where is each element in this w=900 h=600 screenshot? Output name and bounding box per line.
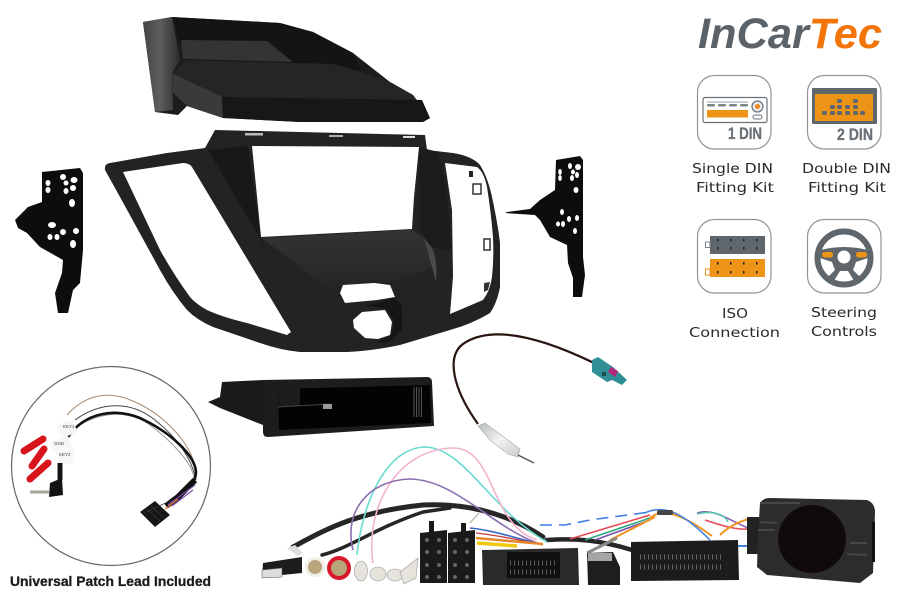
label: ISO connection: Connection bbox=[689, 326, 780, 341]
patch lead red connectors bbox=[24, 439, 48, 479]
vehicle connector large bbox=[482, 548, 579, 585]
label: double DIN bbox=[802, 162, 891, 196]
logo: InCarTec bbox=[698, 10, 882, 58]
top dash shroud bbox=[143, 17, 430, 122]
right mounting bracket bbox=[505, 156, 585, 297]
patch lead circle bbox=[12, 366, 210, 566]
coloured loom wires bbox=[351, 447, 748, 563]
label: ISO connection: ISO bbox=[722, 307, 748, 322]
vehicle connector right bbox=[631, 540, 739, 581]
black harness cables bbox=[293, 505, 632, 555]
icon: steering wheel bbox=[808, 220, 881, 293]
left mounting bracket bbox=[15, 168, 83, 313]
icon: double DIN screen: 2 DIN bbox=[837, 125, 873, 144]
patch lead 3.5mm jack bbox=[30, 463, 63, 497]
patch lead connector bbox=[140, 500, 172, 527]
label: single DIN bbox=[692, 162, 774, 196]
label: steering controls: Controls bbox=[811, 325, 877, 340]
icon: ISO connection bbox=[698, 220, 771, 293]
icon: single DIN radio bbox=[698, 76, 771, 149]
label: single DIN: Single DIN bbox=[692, 162, 773, 177]
label: double DIN: Double DIN bbox=[802, 162, 891, 177]
USB plug bbox=[262, 557, 302, 578]
ISO connectors bbox=[420, 513, 479, 583]
label: ISO connection bbox=[689, 307, 780, 341]
patch lead white labels: KEY1 bbox=[63, 424, 75, 429]
label: steering controls bbox=[811, 306, 877, 340]
single DIN pocket bbox=[208, 377, 434, 437]
label: single DIN: Fitting Kit bbox=[696, 181, 774, 196]
label: double DIN: Fitting Kit bbox=[808, 181, 886, 196]
antenna adapter cable bbox=[454, 334, 627, 463]
patch lead wires bbox=[67, 395, 196, 506]
vehicle connector small bbox=[587, 552, 620, 585]
label: steering controls: Steering bbox=[811, 306, 877, 321]
RCA plugs bbox=[305, 556, 351, 580]
icon: single DIN radio: 1 DIN bbox=[728, 124, 762, 143]
patch lead white labels: GND bbox=[54, 441, 65, 446]
patch lead white labels: KEY2 bbox=[59, 452, 71, 457]
patch lead white labels bbox=[50, 420, 78, 466]
stalk control harness bbox=[262, 447, 875, 585]
patch lead caption: Universal Patch Lead Included bbox=[10, 573, 211, 589]
main double DIN bezel bbox=[105, 130, 500, 352]
antenna jacks bbox=[354, 558, 418, 584]
interface module bbox=[747, 498, 875, 583]
icon: double DIN screen bbox=[808, 76, 881, 149]
